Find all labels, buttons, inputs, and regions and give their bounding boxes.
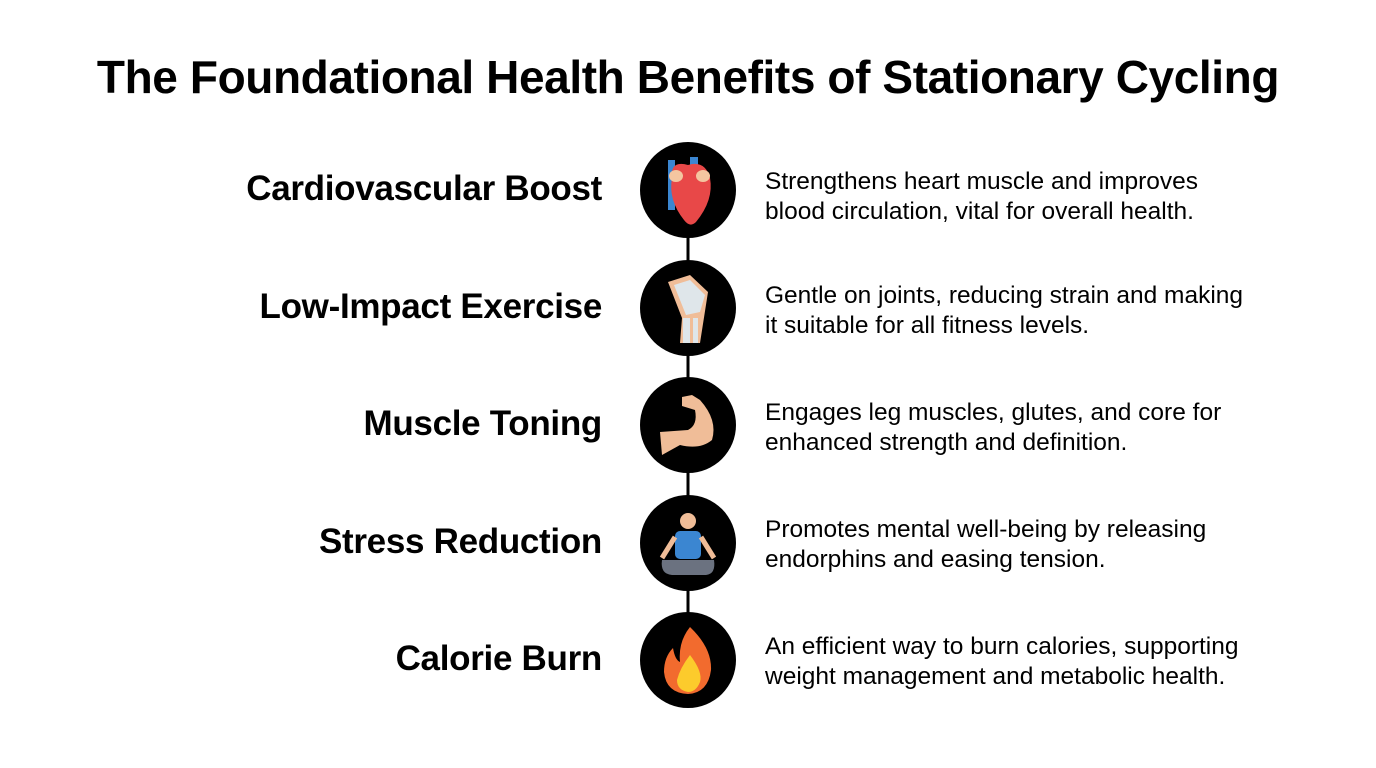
desc: muscle: Engages leg muscles, glutes, and core for xyxy=(765,399,1221,426)
desc: cardiovascular: Strengthens heart muscle and improves xyxy=(765,168,1198,195)
icon: flame xyxy=(640,612,736,708)
desc: low-impact: it suitable for all fitness levels. xyxy=(765,312,1089,339)
desc: cardiovascular xyxy=(765,168,1198,225)
desc: muscle: enhanced strength and definition. xyxy=(765,429,1127,456)
icon: meditation xyxy=(640,495,736,591)
icon: muscle xyxy=(640,377,736,473)
desc: stress xyxy=(765,516,1206,573)
desc: calorie: weight management and metabolic health. xyxy=(765,663,1225,690)
label: cardiovascular: Cardiovascular Boost xyxy=(246,169,602,208)
label: low-impact: Low-Impact Exercise xyxy=(260,287,602,326)
desc: low-impact xyxy=(765,282,1243,339)
desc: calorie: An efficient way to burn calories, supporting xyxy=(765,633,1238,660)
desc: muscle xyxy=(765,399,1221,456)
desc: low-impact: Gentle on joints, reducing strain and making xyxy=(765,282,1243,309)
label: muscle: Muscle Toning xyxy=(363,404,602,443)
label: stress: Stress Reduction xyxy=(319,522,602,561)
title: The Foundational Health Benefits of Stationary Cycling xyxy=(97,51,1279,103)
desc: calorie xyxy=(765,633,1238,690)
desc: stress: endorphins and easing tension. xyxy=(765,546,1106,573)
desc: stress: Promotes mental well-being by releasing xyxy=(765,516,1206,543)
desc: cardiovascular: blood circulation, vital for overall health. xyxy=(765,198,1194,225)
icon: knee xyxy=(640,260,736,356)
label: calorie: Calorie Burn xyxy=(396,639,602,678)
icon: heart xyxy=(640,142,736,238)
